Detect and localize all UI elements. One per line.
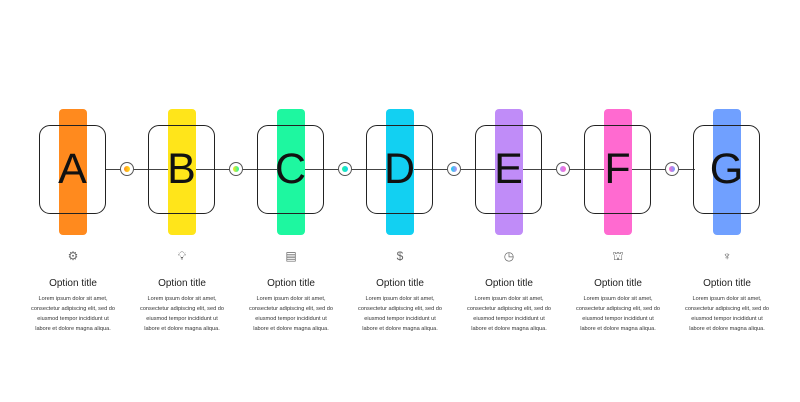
text C: Lorem ipsum dolor sit amet,: [256, 296, 326, 302]
text C: ▤: [285, 249, 297, 263]
text F: labore et dolore magna aliqua.: [580, 326, 656, 332]
text F: Option title: [594, 278, 642, 289]
text F: Lorem ipsum dolor sit amet,: [583, 296, 652, 302]
text B: [140, 249, 224, 332]
text C: eiusmod tempor incididunt ut: [255, 316, 327, 322]
text A: Lorem ipsum dolor sit amet,: [38, 296, 108, 302]
dot BC: [229, 162, 243, 176]
step B: [148, 109, 215, 235]
text C: consectetur adipiscing elit, sed do: [249, 306, 333, 312]
text A: Option title: [49, 278, 97, 289]
text D: Option title: [376, 278, 424, 289]
step D: [366, 109, 433, 235]
text D: labore et dolore magna aliqua.: [362, 326, 438, 332]
text B: labore et dolore magna aliqua.: [144, 326, 220, 332]
text A: ⚙: [68, 249, 78, 263]
step A: [39, 109, 106, 235]
text G: [685, 249, 769, 332]
text F: [576, 249, 660, 332]
text E: labore et dolore magna aliqua.: [471, 326, 547, 332]
text D: Lorem ipsum dolor sit amet,: [365, 296, 434, 302]
text B: 💡︎: [178, 249, 186, 263]
text: C: [275, 145, 306, 193]
text B: eiusmod tempor incididunt ut: [146, 316, 218, 322]
text D: $: [397, 249, 403, 263]
step F: [584, 109, 651, 235]
text E: Option title: [485, 278, 533, 289]
text: A: [58, 145, 87, 193]
text D: consectetur adipiscing elit, sed do: [358, 306, 442, 312]
text: G: [710, 145, 743, 193]
text A: consectetur adipiscing elit, sed do: [31, 306, 115, 312]
text: E: [494, 145, 523, 193]
text A: labore et dolore magna aliqua.: [35, 326, 111, 332]
dot EF: [556, 162, 570, 176]
dot FG: [665, 162, 679, 176]
text B: Option title: [158, 278, 206, 289]
text E: eiusmod tempor incididunt ut: [473, 316, 545, 322]
text A: eiusmod tempor incididunt ut: [37, 316, 109, 322]
text G: Lorem ipsum dolor sit amet,: [692, 296, 762, 302]
dot DE: [447, 162, 461, 176]
text E: Lorem ipsum dolor sit amet,: [474, 296, 544, 302]
dot AB: [120, 162, 134, 176]
text G: labore et dolore magna aliqua.: [689, 326, 765, 332]
text: B: [167, 145, 196, 193]
text F: eiusmod tempor incididunt ut: [582, 316, 654, 322]
text A: [31, 249, 115, 332]
text G: ♆: [722, 249, 732, 263]
text E: [467, 249, 551, 332]
step C: [257, 109, 324, 235]
text E: ◷: [504, 249, 514, 263]
connector line: [106, 169, 695, 170]
text: F: [604, 145, 631, 193]
text G: consectetur adipiscing elit, sed do: [685, 306, 769, 312]
text B: Lorem ipsum dolor sit amet,: [147, 296, 216, 302]
text: D: [384, 145, 415, 193]
text F: consectetur adipiscing elit, sed do: [576, 306, 660, 312]
text C: labore et dolore magna aliqua.: [253, 326, 329, 332]
text B: consectetur adipiscing elit, sed do: [140, 306, 224, 312]
text C: Option title: [267, 278, 315, 289]
dot CD: [338, 162, 352, 176]
text D: eiusmod tempor incididunt ut: [364, 316, 436, 322]
text C: [249, 249, 333, 332]
text G: eiusmod tempor incididunt ut: [691, 316, 763, 322]
step G: [693, 109, 760, 235]
text F: ⛫: [612, 249, 624, 263]
text E: consectetur adipiscing elit, sed do: [467, 306, 551, 312]
text D: [358, 249, 442, 332]
text G: Option title: [703, 278, 751, 289]
step E: [475, 109, 542, 235]
